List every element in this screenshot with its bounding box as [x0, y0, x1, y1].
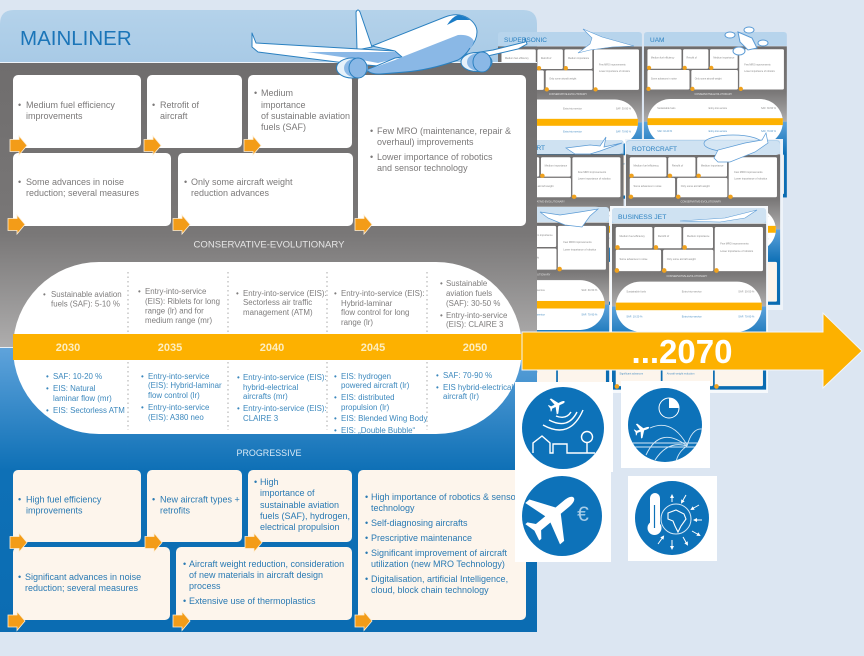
box: new aircraft types progressive — [145, 470, 242, 552]
progressive milestones 2040: CLAIRE 3 — [243, 414, 279, 423]
box: SAF conservative: of sustainable aviation — [261, 111, 350, 121]
box: weight reduction conservative: • — [184, 177, 187, 187]
year band: 2030 — [56, 342, 80, 354]
conservative milestones 2035: • — [138, 287, 141, 296]
box: noise reduction progressive: • — [18, 572, 21, 582]
timeline pill — [13, 262, 522, 435]
illustration: mainliner airplane — [252, 10, 527, 78]
progressive milestones 2045: • — [334, 426, 337, 435]
box: noise reduction conservative — [8, 153, 171, 234]
box: weight reduction progressive: • — [183, 559, 186, 569]
progressive milestones 2045: EIS: distributed — [341, 393, 395, 402]
box: retrofit conservative — [144, 75, 242, 155]
conservative milestones 2045: flow control for long — [341, 308, 409, 317]
progressive milestones 2035: Entry-into-service — [148, 372, 210, 381]
box: robotics progressive: Prescriptive maintenance — [371, 533, 472, 543]
conservative milestones 2045 — [334, 289, 425, 327]
box: SAF progressive: • — [254, 477, 257, 487]
box: MRO conservative: • — [370, 152, 373, 162]
box: weight reduction conservative: reduction advances — [191, 188, 270, 198]
icon: helicopter — [704, 133, 768, 162]
heading: progressive: PROGRESSIVE — [236, 448, 302, 459]
box: weight reduction progressive: process — [189, 581, 221, 591]
year band: 2035 — [158, 342, 182, 354]
box: fuel efficiency progressive: • — [18, 494, 21, 504]
conservative milestones 2050: aviation fuels — [446, 289, 492, 298]
icon: regional plane — [566, 137, 622, 154]
progressive milestones 2040: • — [237, 373, 240, 382]
title: rotorcraft: ROTORCRAFT — [632, 146, 677, 153]
arrow: timeline to 2070 — [522, 313, 862, 388]
progressive milestones 2035: (EIS): A380 neo — [148, 413, 204, 422]
box: robotics progressive: • — [365, 492, 368, 502]
progressive milestones 2050: aircraft (lr) — [443, 392, 479, 401]
box: MRO conservative: Lower importance of robotics — [377, 152, 493, 162]
conservative milestones 2050: Sustainable — [446, 279, 488, 288]
conservative milestones 2045: Entry-into-service (EIS): — [341, 289, 425, 298]
progressive milestones 2030: • — [46, 384, 49, 393]
progressive milestones 2050 — [436, 371, 513, 401]
box: noise reduction conservative: • — [18, 177, 21, 187]
box: MRO conservative: and sensor technology — [377, 163, 468, 173]
conservative milestones 2035: (EIS): Riblets for long — [145, 297, 220, 306]
box: noise reduction progressive — [8, 547, 170, 630]
progressive milestones 2045 — [334, 372, 427, 435]
progressive milestones 2035: (EIS): Hybrid-laminar — [148, 381, 222, 390]
title: airport: AIRPORT — [516, 145, 545, 152]
box: weight reduction progressive: Extensive use of thermoplastics — [189, 596, 316, 606]
conservative milestones 2050: (EIS): CLAIRE 3 — [446, 320, 504, 329]
icon: climate and flight time — [621, 381, 710, 468]
box: SAF progressive: sustainable aviation — [260, 500, 339, 510]
progressive milestones 2045: EIS: „Double Bubble“ — [341, 426, 415, 435]
conservative milestones 2040 — [236, 289, 327, 317]
icon: aircraft noise — [515, 382, 613, 472]
box: SAF conservative: • — [254, 88, 257, 98]
progressive milestones 2040: hybrid-electrical — [243, 383, 299, 392]
box: MRO conservative: overhaul) improvements — [377, 137, 474, 147]
box: fuel efficiency progressive — [10, 470, 141, 552]
box: robotics progressive: • — [365, 533, 368, 543]
conservative milestones 2040: Entry-into-service (EIS): — [243, 289, 327, 298]
box: noise reduction progressive: reduction; several measures — [25, 583, 139, 593]
progressive milestones 2040: aircrafts (mr) — [243, 392, 288, 401]
progressive milestones 2030: laminar flow (mr) — [53, 394, 112, 403]
conservative milestones 2045: • — [334, 289, 337, 298]
conservative milestones 2040: management (ATM) — [243, 308, 313, 317]
progressive milestones 2030: EIS: Natural — [53, 384, 96, 393]
box: SAF progressive: fuels (SAF), hydrogen, — [260, 511, 350, 521]
icon: aircraft cost — [515, 472, 611, 562]
progressive milestones 2035: • — [141, 372, 144, 381]
box: weight reduction progressive — [173, 547, 352, 630]
box: weight reduction conservative: Only some aircraft weight — [191, 177, 293, 187]
progressive milestones 2035: flow control (lr) — [148, 391, 200, 400]
icon: air taxi drone — [725, 27, 768, 55]
progressive milestones 2035: Entry-into-service — [148, 403, 210, 412]
box: weight reduction conservative — [173, 153, 353, 234]
progressive milestones 2030: SAF: 10-20 % — [53, 372, 102, 381]
conservative milestones 2050: • — [440, 279, 443, 288]
progressive milestones 2045: propulsion (lr) — [341, 403, 390, 412]
box: weight reduction progressive: Aircraft weight reduction, consideration — [189, 559, 344, 569]
box: fuel efficiency progressive: improvements — [26, 506, 83, 516]
year band — [13, 334, 522, 360]
progressive milestones 2030: EIS: Sectorless ATM — [53, 406, 125, 415]
box: SAF progressive: electrical propulsion — [260, 522, 340, 532]
progressive milestones 2045: • — [334, 393, 337, 402]
title: UAM: UAM — [650, 37, 664, 44]
progressive milestones 2030: • — [46, 406, 49, 415]
box: retrofit conservative: aircraft — [160, 111, 188, 121]
box: SAF progressive: High — [260, 477, 279, 487]
box: noise reduction progressive: Significant advances in noise — [25, 572, 141, 582]
icon: business jet — [680, 210, 757, 222]
conservative milestones 2030: Sustainable aviation — [51, 290, 122, 299]
box: SAF conservative — [244, 75, 352, 155]
conservative milestones 2035: medium range (mr) — [145, 316, 212, 325]
box: robotics progressive: • — [365, 574, 368, 584]
progressive milestones 2050: EIS hybrid-electrical — [443, 383, 513, 392]
conservative milestones 2035: Entry-into-service — [145, 287, 207, 296]
progressive milestones 2050: • — [436, 371, 439, 380]
progressive milestones 2040: Entry-into-service (EIS): — [243, 404, 327, 413]
icon: supersonic jet — [578, 29, 634, 53]
box: robotics progressive: utilization (new MRO Technology) — [371, 559, 505, 569]
progressive milestones 2030: • — [46, 372, 49, 381]
panel: rotorcraft thumbnail — [625, 133, 783, 310]
panel: airport thumbnail — [470, 137, 624, 305]
box: robotics progressive: technology — [371, 503, 415, 513]
box: noise reduction conservative: reduction; several measures — [26, 188, 140, 198]
progressive milestones 2040: Entry-into-service (EIS): — [243, 373, 327, 382]
box: robotics progressive: • — [365, 518, 368, 528]
year band: 2045 — [361, 342, 385, 354]
panel: mainliner — [0, 27, 537, 632]
conservative milestones 2040: Sectorless air traffic — [243, 298, 312, 307]
box: fuel efficiency conservative: • — [18, 100, 21, 110]
conservative milestones 2045: Hybrid-laminar — [341, 299, 393, 308]
box: MRO conservative — [355, 75, 526, 234]
heading: conservative-evolutionary: CONSERVATIVE-EVOLUTIONARY — [194, 240, 345, 250]
progressive milestones 2045: • — [334, 414, 337, 423]
box: SAF progressive: importance of — [260, 488, 315, 498]
box: retrofit conservative: Retrofit of — [160, 100, 200, 110]
box: noise reduction conservative: Some advances in noise — [26, 177, 124, 187]
box: robotics progressive: Self-diagnosing aircrafts — [371, 518, 468, 528]
conservative milestones 2030: • — [43, 290, 46, 299]
conservative milestones 2040: • — [236, 289, 239, 298]
progressive milestones 2040 — [237, 373, 327, 423]
progressive milestones 2050: • — [436, 383, 439, 392]
box: retrofit conservative: • — [152, 100, 155, 110]
progressive milestones 2040: • — [237, 404, 240, 413]
box: SAF progressive — [245, 470, 352, 552]
label: 2070: ...2070 — [632, 333, 732, 370]
box: fuel efficiency conservative: improvements — [26, 111, 83, 121]
box: robotics progressive: cloud, block chain technology — [371, 585, 489, 595]
progressive milestones 2035 — [141, 372, 222, 422]
progressive milestones 2045: EIS: hydrogen — [341, 372, 391, 381]
conservative milestones 2035 — [138, 287, 220, 325]
box: robotics progressive: Digitalisation, artificial Intelligence, — [371, 574, 508, 584]
conservative milestones 2050 — [440, 279, 508, 329]
box: new aircraft types progressive: retrofits — [160, 506, 191, 516]
heading: mainliner: MAINLINER — [20, 27, 132, 50]
box: robotics progressive — [355, 470, 526, 630]
icon: commuter plane — [540, 209, 598, 227]
progressive milestones 2045: EIS: Blended Wing Body — [341, 414, 427, 423]
conservative milestones 2030 — [43, 290, 122, 308]
box: SAF conservative: fuels (SAF) — [261, 122, 306, 132]
box: robotics progressive: • — [365, 548, 368, 558]
section: conservative background — [0, 63, 537, 347]
box: SAF conservative: Medium — [261, 88, 293, 98]
box: new aircraft types progressive: • — [152, 494, 155, 504]
box: fuel efficiency conservative — [10, 75, 141, 155]
box: robotics progressive: High importance of robotics & sensor — [371, 492, 519, 502]
panel header: mainliner — [0, 10, 537, 62]
conservative milestones 2050: Entry-into-service — [446, 311, 508, 320]
conservative milestones 2050: • — [440, 311, 443, 320]
panel: supersonic thumbnail — [498, 29, 642, 199]
conservative milestones 2050: (SAF): 30-50 % — [446, 299, 500, 308]
panel: UAM thumbnail — [644, 27, 787, 197]
progressive milestones 2030 — [46, 372, 125, 415]
box: MRO conservative: Few MRO (maintenance, repair & — [377, 126, 511, 136]
section: progressive background — [0, 348, 537, 632]
box: SAF conservative: importance — [261, 100, 306, 110]
progressive milestones 2045: • — [334, 372, 337, 381]
icon: global warming — [628, 476, 717, 561]
conservative milestones 2035: range (lr) and for — [145, 306, 204, 316]
year band: 2040 — [260, 342, 284, 354]
box: robotics progressive: Significant improvement of aircraft — [371, 548, 508, 558]
panel: commuter thumbnail — [455, 207, 609, 387]
conservative milestones 2045: range (lr) — [341, 318, 373, 327]
progressive milestones 2035: • — [141, 403, 144, 412]
progressive milestones 2050: SAF: 70-90 % — [443, 371, 492, 380]
conservative milestones 2030: fuels (SAF): 5-10 % — [51, 300, 120, 308]
box: fuel efficiency progressive: High fuel efficiency — [26, 494, 102, 504]
box: weight reduction progressive: of new materials in aircraft design — [189, 570, 323, 580]
box: fuel efficiency conservative: Medium fuel efficiency — [26, 100, 115, 110]
year band: 2050 — [463, 342, 487, 354]
panel: business jet thumbnail — [610, 206, 768, 393]
box: MRO conservative: • — [370, 126, 373, 136]
title: business jet: BUSINESS JET — [618, 214, 666, 221]
title: supersonic: SUPERSONIC — [504, 37, 547, 44]
progressive milestones 2045: powered aircraft (lr) — [341, 381, 410, 390]
box: weight reduction progressive: • — [183, 596, 186, 606]
icon: aircraft cost: € — [577, 503, 589, 526]
box: new aircraft types progressive: New aircraft types + — [160, 494, 240, 504]
